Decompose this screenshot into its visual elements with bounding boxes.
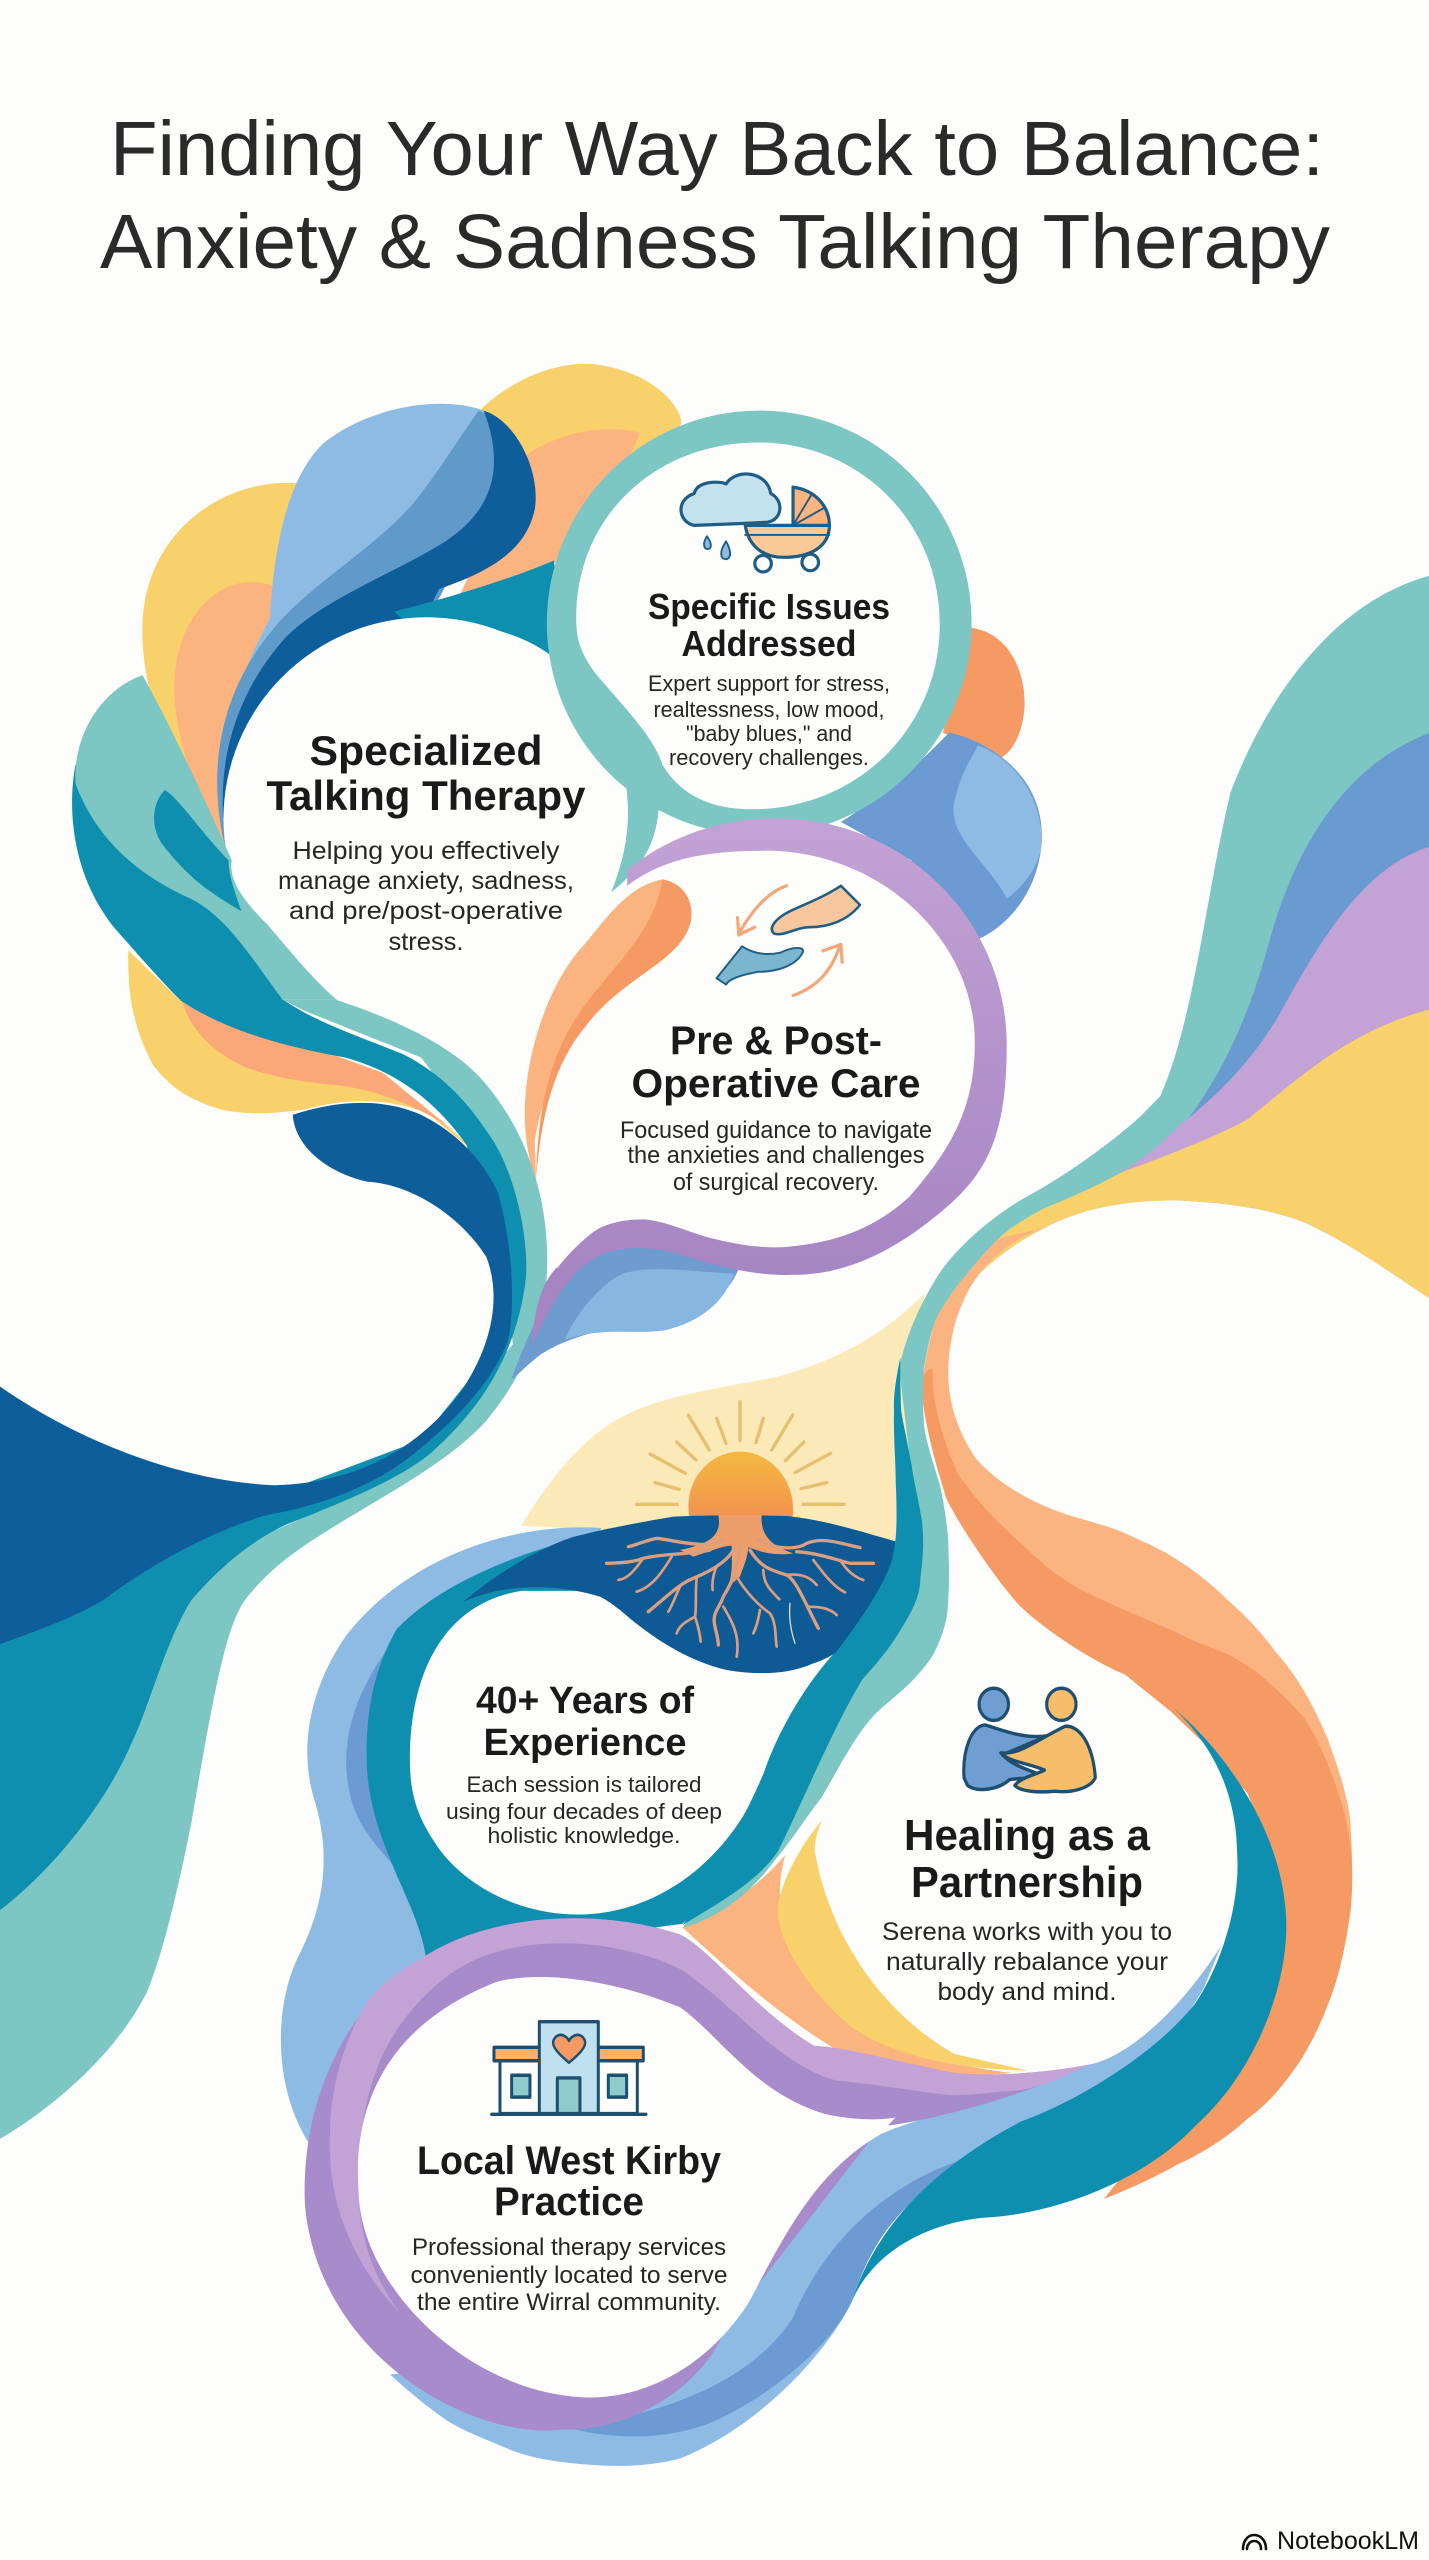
body text: conveniently located to serve [410,2262,728,2289]
body text: the anxieties and challenges [628,1142,924,1169]
body text: Focused guidance to navigate [620,1117,932,1144]
hill [463,1515,897,1673]
heading [632,1019,920,1106]
heading [648,586,890,664]
panel: Pre and Post-Operative Care [620,886,932,1196]
title: Finding Your Way Back to Balance: [110,106,1324,192]
body text: and pre/post-operative [289,897,563,925]
heading [476,1680,694,1764]
title [100,106,1331,285]
body text: holistic knowledge. [488,1823,680,1848]
icon: NotebookLM arcs [1243,2535,1266,2549]
body text: recovery challenges. [669,745,869,770]
heading: Pre & Post- [670,1019,882,1063]
body text [446,1772,722,1848]
ribbons: lower left petals [128,950,469,1147]
heading: 40+ Years of [476,1680,694,1722]
ribbons: teal strand over the sun [683,1097,1188,1928]
body text: realtessness, low mood, [654,697,884,722]
body text [410,2234,728,2316]
panel: Local West Kirby Practice [410,2022,728,2316]
body text: "baby blues," and [686,721,852,746]
body text: stress. [388,928,464,956]
body text: Professional therapy services [412,2234,726,2261]
body text: manage anxiety, sadness, [278,867,574,895]
title: Anxiety & Sadness Talking Therapy [100,199,1331,285]
icon: rain cloud and pram [681,474,829,572]
heading [266,727,586,819]
heading [417,2139,722,2224]
ribbons: lower cluster back layers [281,1293,1027,2153]
icon: two people embracing [964,1688,1095,1792]
sun [688,1452,793,1517]
body text: naturally rebalance your [886,1948,1168,1976]
icon: clinic building with heart [492,2022,646,2114]
panel: Healing as a Partnership [882,1688,1172,2006]
body text [278,837,574,956]
body text: Helping you effectively [292,837,560,865]
body text: Expert support for stress, [648,671,890,696]
ribbons: lower left flow [0,1000,547,2139]
heading: Experience [484,1722,686,1764]
heading: Practice [494,2180,644,2224]
sun rays [637,1402,844,1504]
ribbons: upper left cluster petals [72,364,1042,1020]
illustration: sun and roots [463,1402,897,1673]
heading [904,1811,1151,1907]
heading: Addressed [682,623,856,664]
panel: Specific Issues Addressed [648,474,890,770]
rings: Specific Issues and Pre and Post circles [511,411,1007,1380]
body text: body and mind. [938,1978,1116,2006]
heading: Talking Therapy [266,772,586,819]
brand name: NotebookLM [1277,2527,1419,2555]
heading: Specialized [310,727,542,774]
body text [648,671,890,770]
heading: Specific Issues [648,586,890,627]
heading: Partnership [911,1858,1143,1907]
roots [607,1515,873,1657]
heading: Operative Care [632,1062,920,1106]
heading: Local West Kirby [417,2139,722,2183]
body text: the entire Wirral community. [417,2289,721,2316]
icon: helping hands and arrows [717,886,860,995]
ribbon: big orange sweep [922,1227,1352,2199]
heading: Healing as a [904,1811,1151,1860]
body text: Serena works with you to [882,1918,1172,1946]
ribbons: upper right flow [930,576,1429,1335]
body text [620,1117,932,1196]
body text [882,1918,1172,2006]
panel: Specialized Talking Therapy [266,727,586,956]
body text: Each session is tailored [466,1772,702,1797]
panel: 40+ Years of Experience [446,1680,722,1848]
body text: using four decades of deep [446,1799,722,1824]
footer: NotebookLM logo [1243,2527,1419,2555]
body text: of surgical recovery. [673,1169,879,1196]
ribbons: lower cluster front layers [305,1709,1286,2466]
